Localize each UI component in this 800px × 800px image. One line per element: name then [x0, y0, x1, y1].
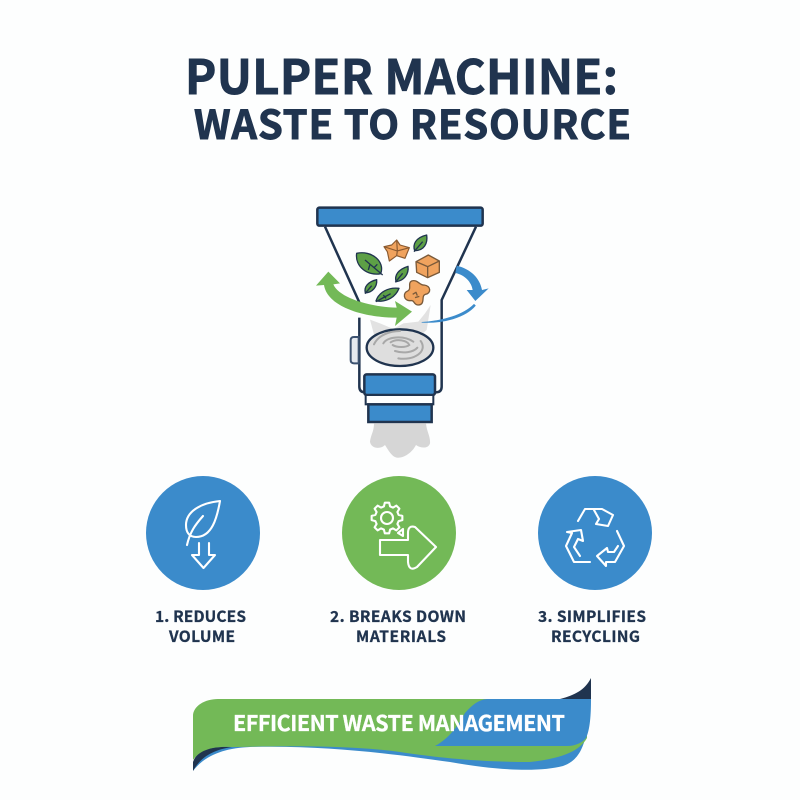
banner blue end [435, 699, 591, 746]
label [538, 605, 646, 647]
label: 1. REDUCES [155, 605, 246, 627]
banner green body [193, 699, 587, 762]
label [155, 605, 246, 647]
label: 2. BREAKS DOWN [330, 605, 466, 627]
machine body [325, 227, 476, 392]
discharge [368, 404, 432, 422]
crumpled waste [404, 281, 430, 305]
label: RECYCLING [551, 625, 640, 647]
pulper machine illustration [316, 208, 489, 458]
green arrow [316, 272, 412, 326]
icon: leaf with down arrow [186, 501, 220, 568]
leaf 3 [395, 266, 408, 282]
hopper rim [317, 208, 483, 226]
side knob [351, 337, 359, 363]
title: PULPER MACHINE: [185, 39, 618, 108]
panel: reduces volume [146, 476, 260, 647]
pulping disc [367, 329, 433, 366]
pulp output [370, 423, 430, 458]
icon: recycling arrows [566, 509, 624, 566]
banner dark folds [193, 678, 591, 771]
banner text: EFFICIENT WASTE MANAGEMENT [233, 707, 565, 738]
label: 3. SIMPLIFIES [538, 605, 646, 627]
label [330, 605, 466, 647]
blue circle [538, 476, 652, 590]
panel: simplifies recycling [538, 476, 652, 647]
label: MATERIALS [356, 625, 446, 647]
banner lower blue ribbon [193, 700, 590, 771]
panel: breaks down materials [330, 476, 466, 647]
title [185, 39, 631, 151]
blue arrow [422, 266, 489, 322]
leaf 4 [365, 280, 377, 294]
leaf 1 [356, 253, 383, 275]
label: VOLUME [168, 625, 235, 647]
green circle [342, 476, 456, 590]
flattened box [384, 240, 409, 261]
torn pulp [370, 305, 431, 338]
title: WASTE TO RESOURCE [194, 93, 631, 151]
banner [193, 678, 591, 771]
icon: gear and arrow [372, 503, 436, 569]
box [416, 255, 439, 278]
leaf 2 [414, 235, 427, 252]
collar [364, 374, 435, 395]
waste items [356, 235, 439, 305]
leaf 5 [376, 288, 399, 302]
blue circle [146, 476, 260, 590]
